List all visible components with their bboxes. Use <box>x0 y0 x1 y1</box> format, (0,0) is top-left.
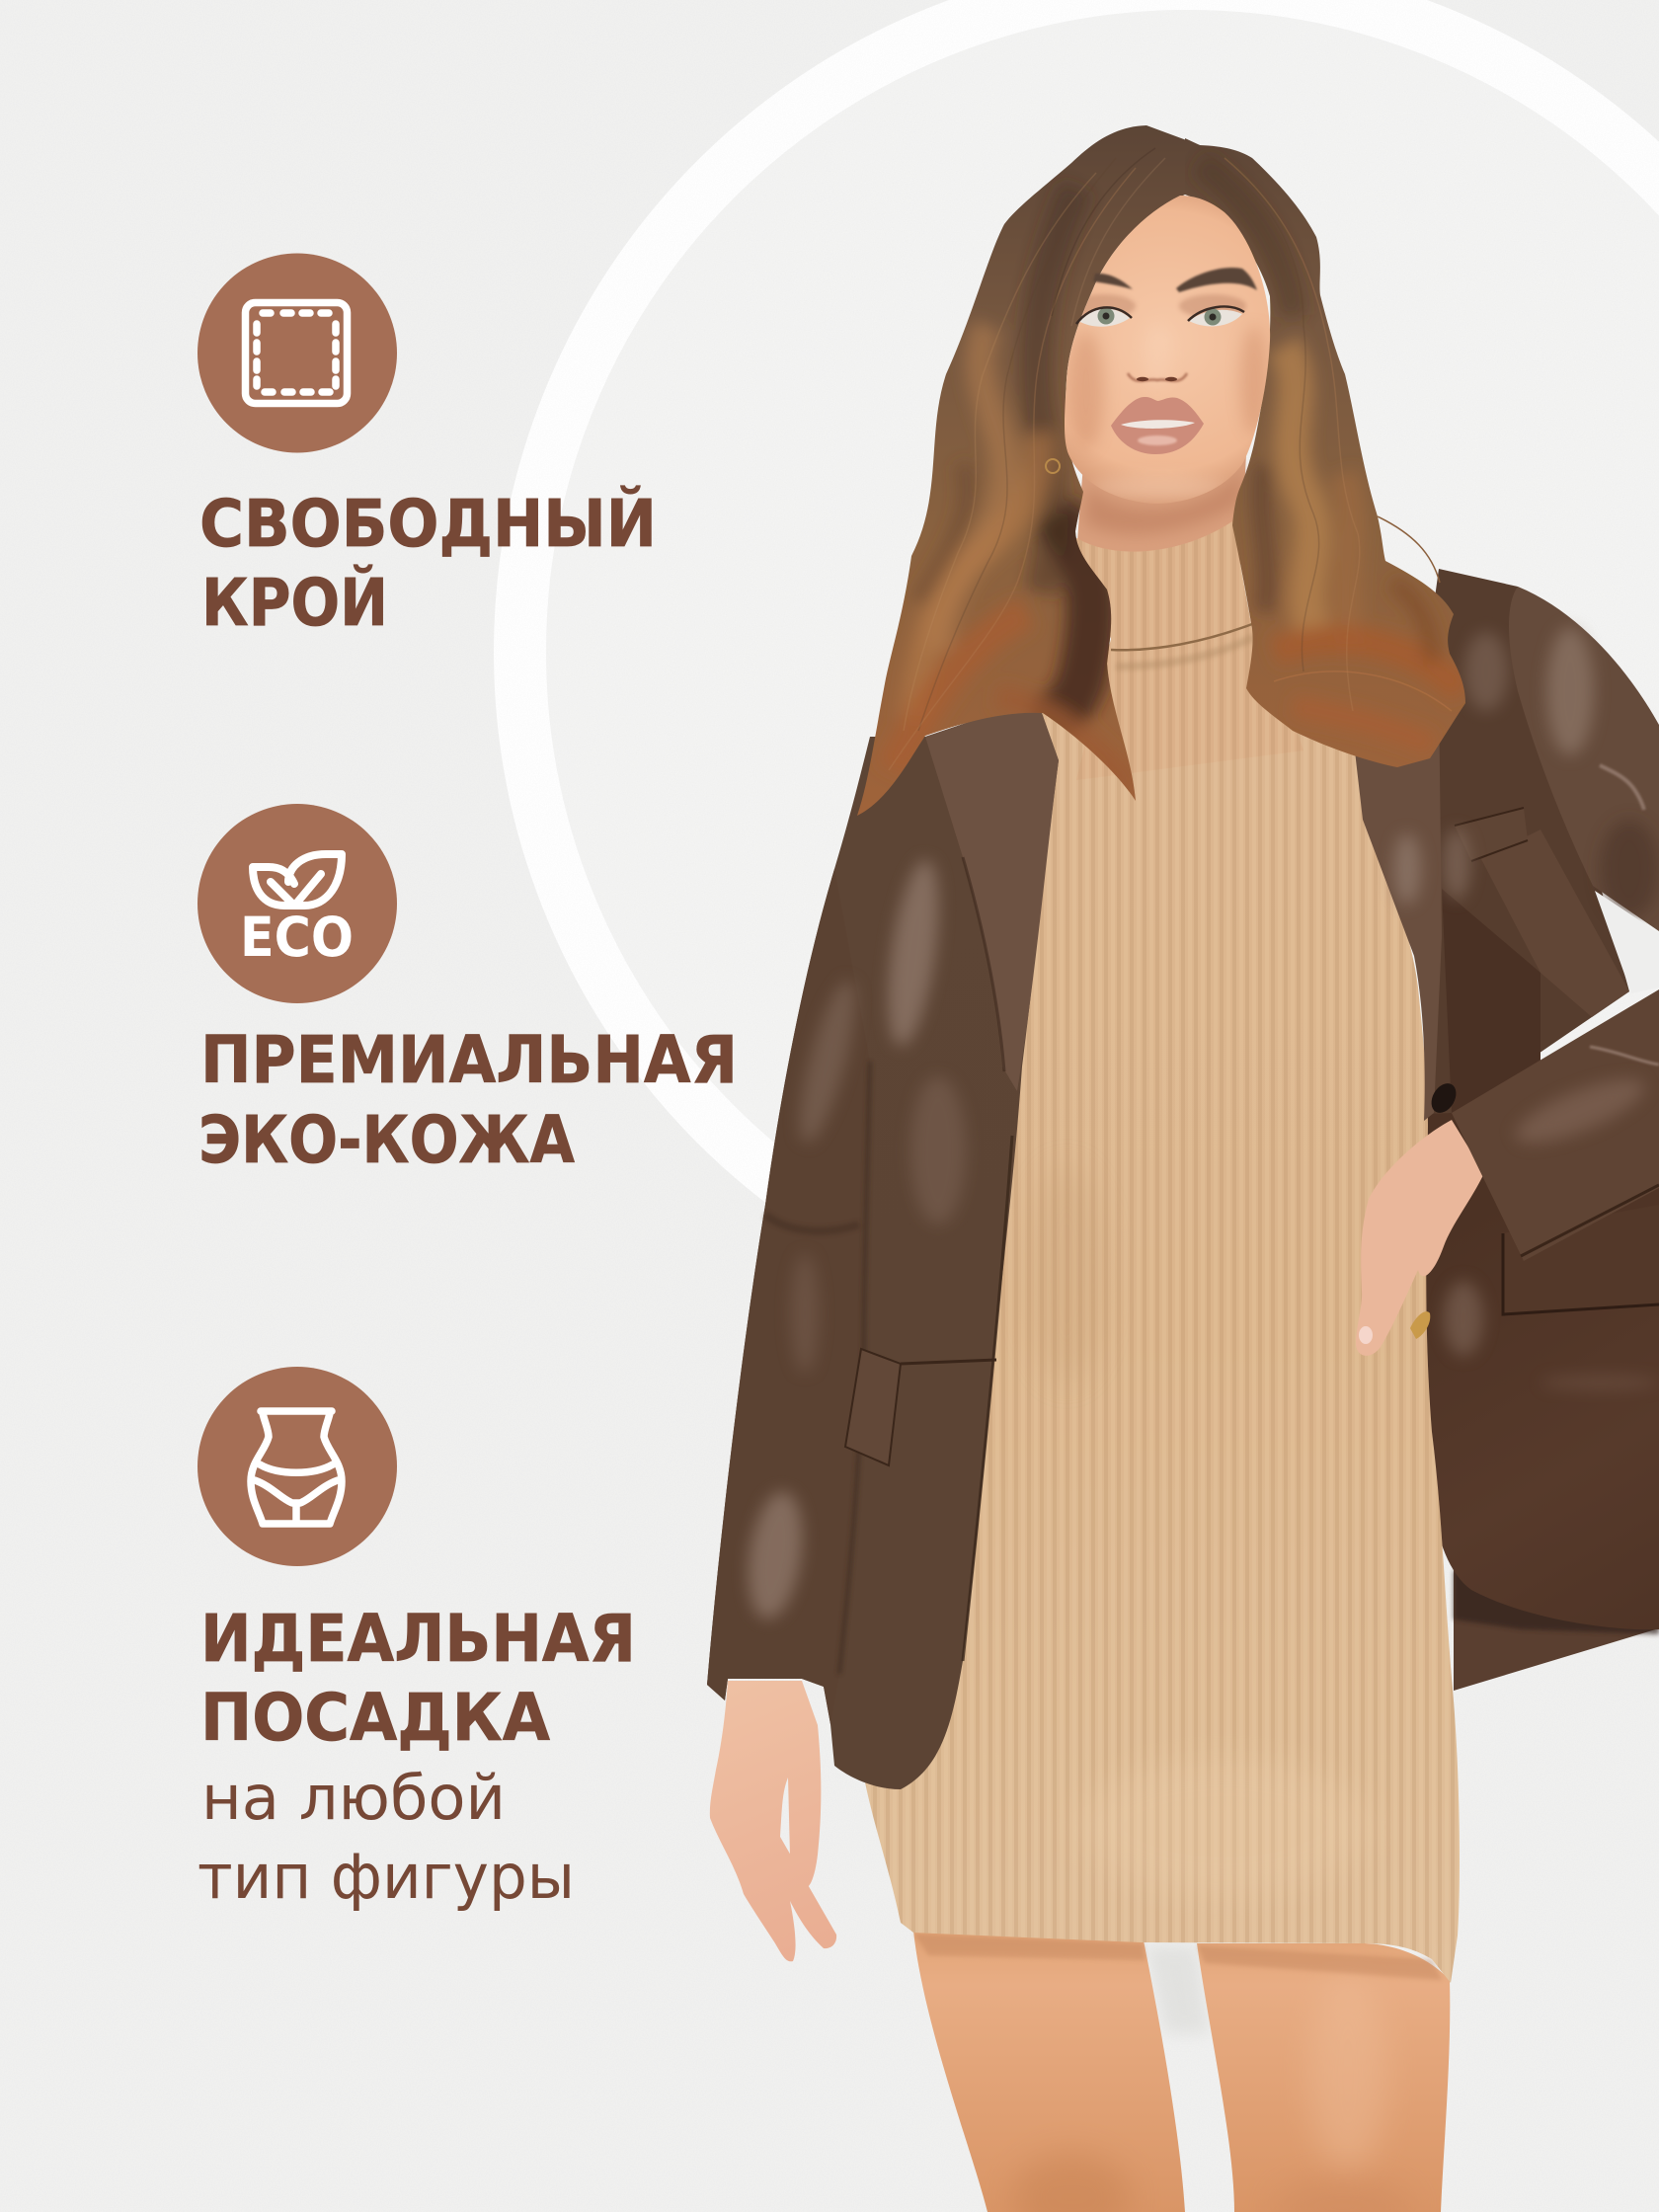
front hem edge <box>963 1136 1012 1661</box>
heading: free cut <box>199 485 657 641</box>
right eye <box>1188 306 1244 326</box>
heading: free cut: КРОЙ <box>201 564 388 641</box>
hair left side <box>857 125 1200 816</box>
icon: stitched square <box>198 253 397 452</box>
neck <box>1073 454 1246 592</box>
heading: premium eco leather: ПРЕМИАЛЬНАЯ <box>200 1022 738 1098</box>
sleeve highlights <box>741 1488 810 1622</box>
left hand <box>710 1681 836 1961</box>
nose <box>1128 324 1187 387</box>
earring <box>1046 459 1060 473</box>
heading: perfect fit: ПОСАДКА <box>200 1680 550 1756</box>
left eye <box>1076 307 1132 327</box>
panel highlights <box>879 857 948 1049</box>
face <box>1046 196 1270 504</box>
heading: perfect fit: на любой <box>201 1762 506 1834</box>
eyebrows <box>1093 274 1133 289</box>
hair right side <box>1185 138 1465 767</box>
heading: free cut: СВОБОДНЫЙ <box>199 485 657 562</box>
pocket flap <box>845 1349 901 1465</box>
left jacket <box>707 699 1059 1789</box>
gap between sleeve and body <box>1595 891 1659 993</box>
dark button <box>1426 1079 1462 1117</box>
heading: perfect fit: тип фигуры <box>198 1841 575 1913</box>
eye shadows <box>1082 292 1137 316</box>
hanging jacket front <box>1412 1106 1659 1629</box>
body highlights and chest pocket <box>1442 632 1629 1113</box>
icon: eco leaves <box>198 804 397 1003</box>
right lapel <box>1348 691 1442 1121</box>
model figure <box>707 125 1659 2212</box>
icon: eco leaves: ECO <box>240 906 354 969</box>
lapel <box>925 699 1059 1091</box>
turtleneck <box>1073 521 1304 780</box>
lips <box>1111 397 1204 454</box>
legs <box>913 1931 1450 2212</box>
heading: perfect fit: ИДЕАЛЬНАЯ <box>200 1601 636 1677</box>
white ring <box>519 0 1659 1319</box>
heading: perfect fit <box>198 1601 636 1913</box>
tail inner shadow <box>1454 1570 1659 1634</box>
neck shadow <box>1084 464 1246 535</box>
icon: waist silhouette <box>198 1367 397 1566</box>
lapel shine <box>1393 833 1421 905</box>
jacket body right <box>1422 569 1629 1114</box>
hand on hip <box>1356 1120 1484 1356</box>
hanging pocket flap <box>1444 1205 1659 1390</box>
heading: premium eco leather <box>198 1022 738 1178</box>
right upper sleeve <box>1509 587 1659 931</box>
shadow between legs <box>1146 1945 1210 2034</box>
inner lighter disc <box>546 10 1659 1294</box>
right forearm sleeve <box>1452 989 1659 1261</box>
dress <box>864 681 1460 1983</box>
hanging jacket tail <box>1454 1540 1659 1691</box>
cheek contour <box>1068 331 1104 449</box>
left sleeve shading <box>707 869 870 1724</box>
heading: premium eco leather: ЭКО-КОЖА <box>198 1102 575 1178</box>
